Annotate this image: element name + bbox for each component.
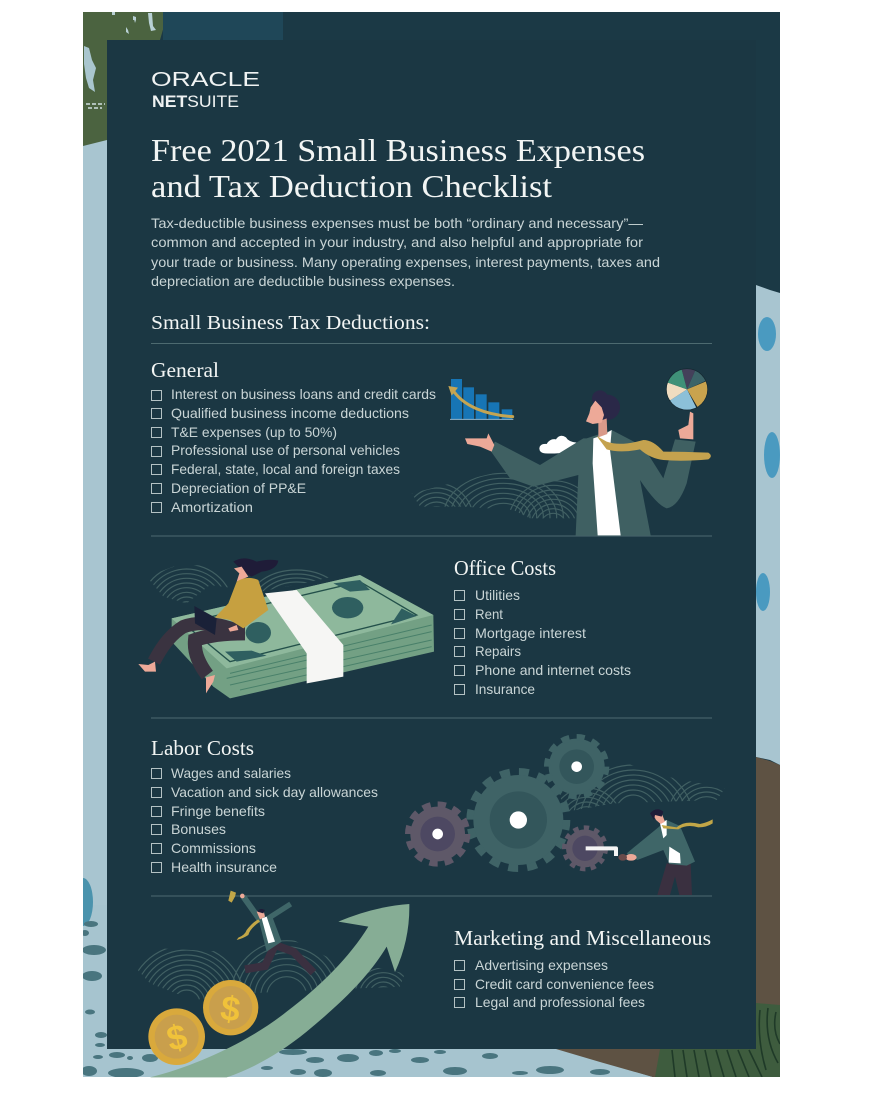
right blue strip bbox=[756, 285, 780, 765]
fingerprint lines bbox=[138, 940, 404, 1000]
section: General bbox=[151, 362, 711, 536]
heading: Marketing and Miscellaneous: Marketing and Miscellaneous bbox=[454, 926, 711, 950]
illustration: coins, growth arrow and running businessman bbox=[128, 891, 412, 1077]
checklist: Office Costs: Insurance bbox=[475, 681, 535, 697]
intro text: depreciation are deductible business expenses. bbox=[151, 273, 455, 289]
bottom blue strip bbox=[83, 1049, 652, 1077]
fingerprint lines bbox=[412, 472, 578, 518]
checklist: General: Amortization bbox=[171, 499, 253, 515]
checklist: General: Professional use of personal vehicles bbox=[171, 442, 400, 458]
checklist: Marketing and Miscellaneous: Credit card convenience fees bbox=[475, 976, 654, 992]
cloud icon bbox=[539, 436, 577, 454]
logo: Oracle NetSuite: ORACLE bbox=[151, 69, 260, 91]
bottom brown strip bbox=[556, 1049, 660, 1077]
money stack bbox=[172, 575, 434, 698]
section: Marketing and Miscellaneous bbox=[454, 926, 711, 1010]
left blue blob bbox=[83, 878, 93, 926]
coin: front bbox=[148, 1008, 205, 1065]
intro text: Tax-deductible business expenses must be both “ordinary and necessary”— bbox=[151, 215, 643, 231]
section: Office Costs bbox=[138, 556, 631, 698]
logo: Oracle NetSuite bbox=[151, 69, 260, 111]
coin: front: $ bbox=[163, 1018, 191, 1059]
intro text: your trade or business. Many operating expenses, interest payments, taxes and bbox=[151, 254, 660, 270]
section: Labor Costs bbox=[151, 736, 745, 895]
checklist: Marketing and Miscellaneous bbox=[454, 957, 654, 1010]
checklist: Labor Costs: Fringe benefits bbox=[171, 803, 265, 819]
bar chart icon bbox=[448, 379, 513, 419]
top green corner bbox=[83, 12, 168, 146]
checklist: General: Federal, state, local and foreign taxes bbox=[171, 461, 400, 477]
paper band bbox=[265, 590, 343, 683]
running businessman bbox=[228, 891, 313, 973]
heading: Labor Costs: Labor Costs bbox=[151, 736, 254, 760]
intro text bbox=[151, 215, 660, 289]
businessman figure bbox=[618, 809, 713, 895]
checklist: Labor Costs: Commissions bbox=[171, 840, 256, 856]
checklist: Labor Costs: Vacation and sick day allowances bbox=[171, 784, 378, 800]
checklist: Marketing and Miscellaneous: Advertising expenses bbox=[475, 957, 608, 973]
title: Free 2021 Small Business Expenses bbox=[151, 132, 645, 168]
heading: General: General bbox=[151, 358, 219, 382]
fingerprint lines bbox=[561, 764, 725, 811]
main panel bbox=[107, 40, 756, 1049]
fingerprint lines bbox=[150, 565, 328, 602]
left blue strip bbox=[83, 140, 107, 905]
coin: back bbox=[203, 980, 258, 1035]
top blue patch bbox=[163, 12, 283, 40]
title bbox=[151, 132, 645, 204]
checklist: Marketing and Miscellaneous: Legal and professional fees bbox=[475, 994, 645, 1010]
illustration: woman with laptop on money stack bbox=[138, 558, 434, 698]
pie chart icon bbox=[666, 368, 708, 410]
checklist: Office Costs: Repairs bbox=[475, 643, 521, 659]
woman figure bbox=[138, 558, 278, 693]
illustration: businessman with chart and pie bbox=[412, 368, 711, 536]
checklist: Labor Costs: Wages and salaries bbox=[171, 765, 291, 781]
checklist: General: Depreciation of PP&E bbox=[171, 480, 306, 496]
gear: top bbox=[547, 737, 606, 796]
checklist: Office Costs: Utilities bbox=[475, 587, 520, 603]
background artwork bbox=[73, 12, 780, 1078]
illustration: gears and businessman bbox=[408, 737, 745, 895]
coin: back: $ bbox=[218, 989, 243, 1030]
checklist: General: T&E expenses (up to 50%) bbox=[171, 424, 337, 440]
gear: small purple with crank bbox=[564, 828, 616, 869]
intro text: common and accepted in your industry, and also helpful and appropriate for bbox=[151, 234, 643, 250]
gear: left purple bbox=[408, 805, 467, 863]
growth arrow bbox=[150, 904, 409, 1077]
businessman figure bbox=[465, 390, 711, 535]
checklist: Labor Costs: Bonuses bbox=[171, 821, 226, 837]
checklist: General: Qualified business income deductions bbox=[171, 405, 409, 421]
checklist: Labor Costs bbox=[152, 765, 378, 875]
checklist: Office Costs: Rent bbox=[475, 606, 503, 622]
heading: Office Costs: Office Costs bbox=[454, 556, 556, 580]
checklist: General: Interest on business loans and credit cards bbox=[171, 386, 436, 402]
right brown strip bbox=[756, 757, 780, 1010]
checklist: Office Costs: Phone and internet costs bbox=[475, 662, 631, 678]
checklist: General bbox=[152, 386, 436, 515]
checklist: Office Costs bbox=[454, 587, 631, 697]
bottom green corner bbox=[655, 1003, 780, 1077]
subheading: Small Business Tax Deductions: bbox=[151, 312, 430, 334]
gear: large bbox=[470, 772, 567, 868]
logo: Oracle NetSuite: NETSUITE bbox=[152, 92, 239, 111]
bottom spots bbox=[81, 921, 610, 1078]
checklist: Office Costs: Mortgage interest bbox=[475, 625, 586, 641]
title: and Tax Deduction Checklist bbox=[151, 168, 552, 204]
checklist: Labor Costs: Health insurance bbox=[171, 859, 277, 875]
right blue ovals bbox=[756, 317, 780, 611]
